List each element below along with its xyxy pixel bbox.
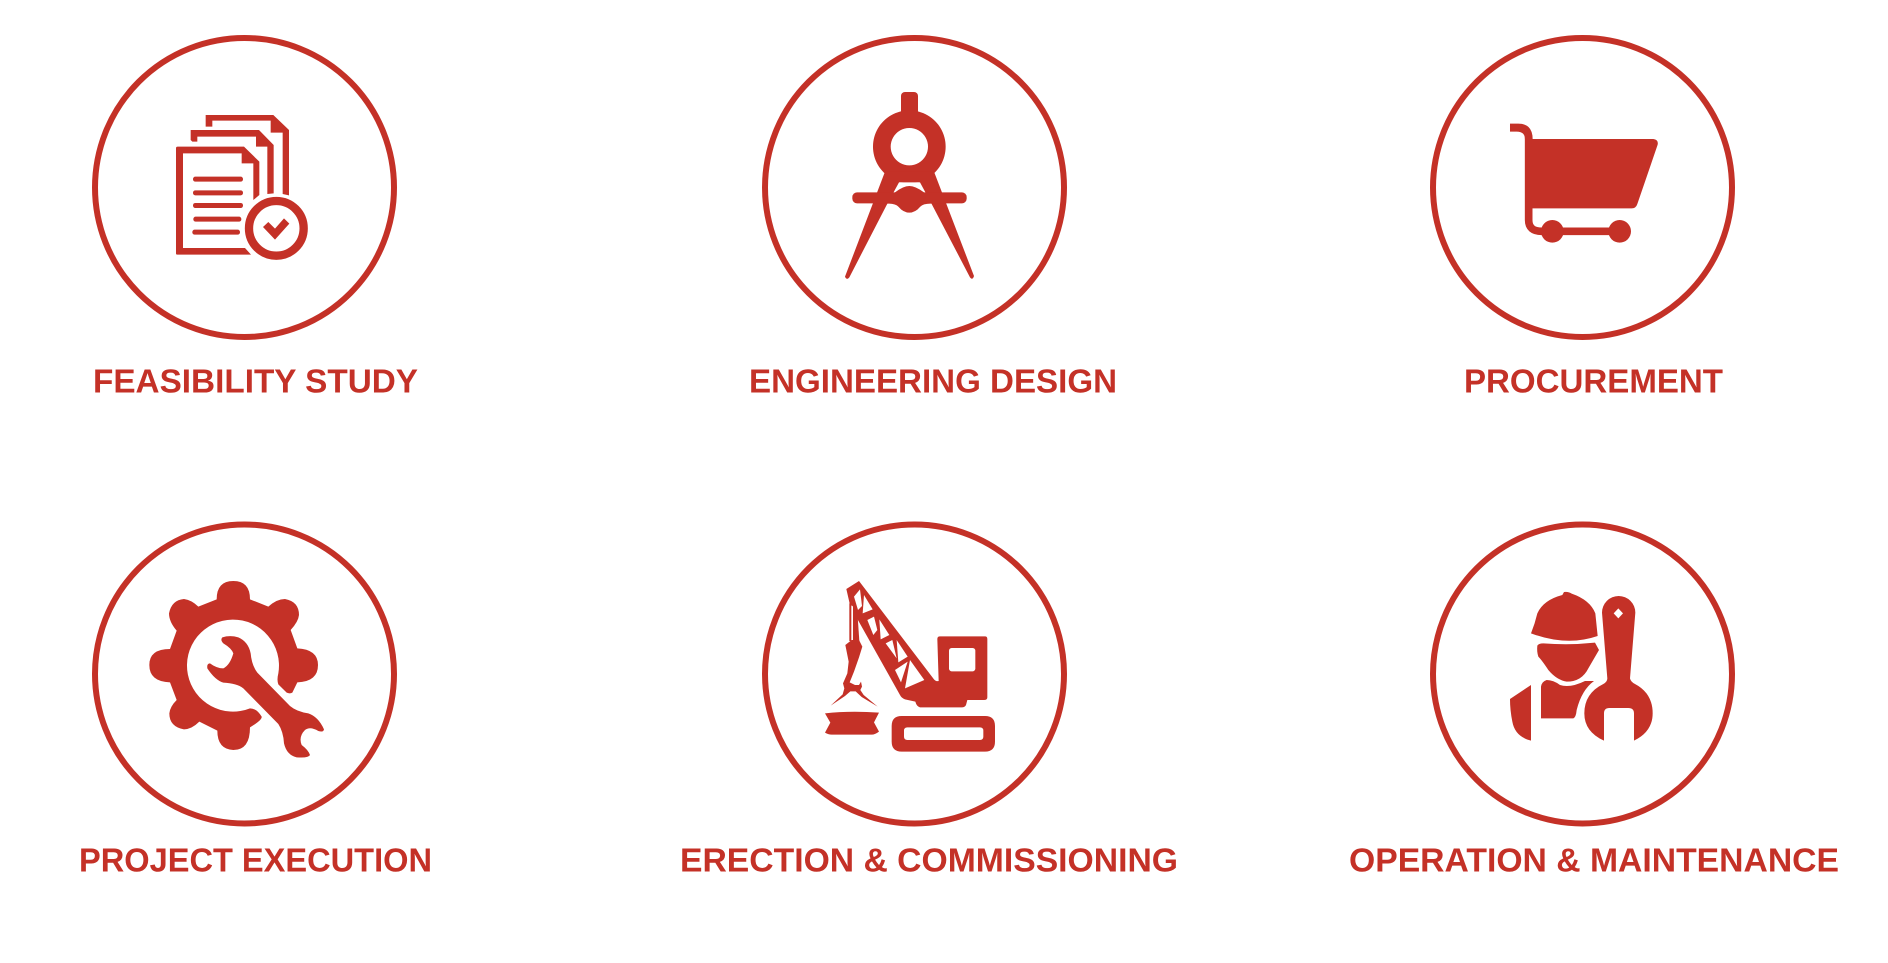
icon: drafting compass [845,92,974,279]
panel: procurement [1433,38,1732,400]
icon: documents with check mark [176,115,304,256]
label: FEASIBILITY STUDY [93,363,418,400]
label: PROJECT EXECUTION [79,842,432,879]
circle ring [1433,524,1732,824]
label: PROCUREMENT [1464,363,1723,400]
panel: erection and commissioning [680,524,1178,879]
label: OPERATION & MAINTENANCE [1349,842,1839,879]
icon: crawler crane [825,581,995,752]
circle ring [1433,38,1732,337]
icon: shopping cart [1510,124,1658,243]
label: ENGINEERING DESIGN [749,363,1117,400]
circle ring [765,38,1064,337]
panel: feasibility study [93,38,418,400]
panel: project execution [79,524,432,879]
panel: operation and maintenance [1349,524,1839,879]
circle ring [95,524,394,824]
icon: worker with wrench [1510,592,1653,741]
label: ERECTION & COMMISSIONING [680,842,1178,879]
circle ring [765,524,1064,824]
icon: gear with wrench [149,581,324,758]
panel: engineering design [749,38,1117,400]
circle ring [95,38,394,337]
